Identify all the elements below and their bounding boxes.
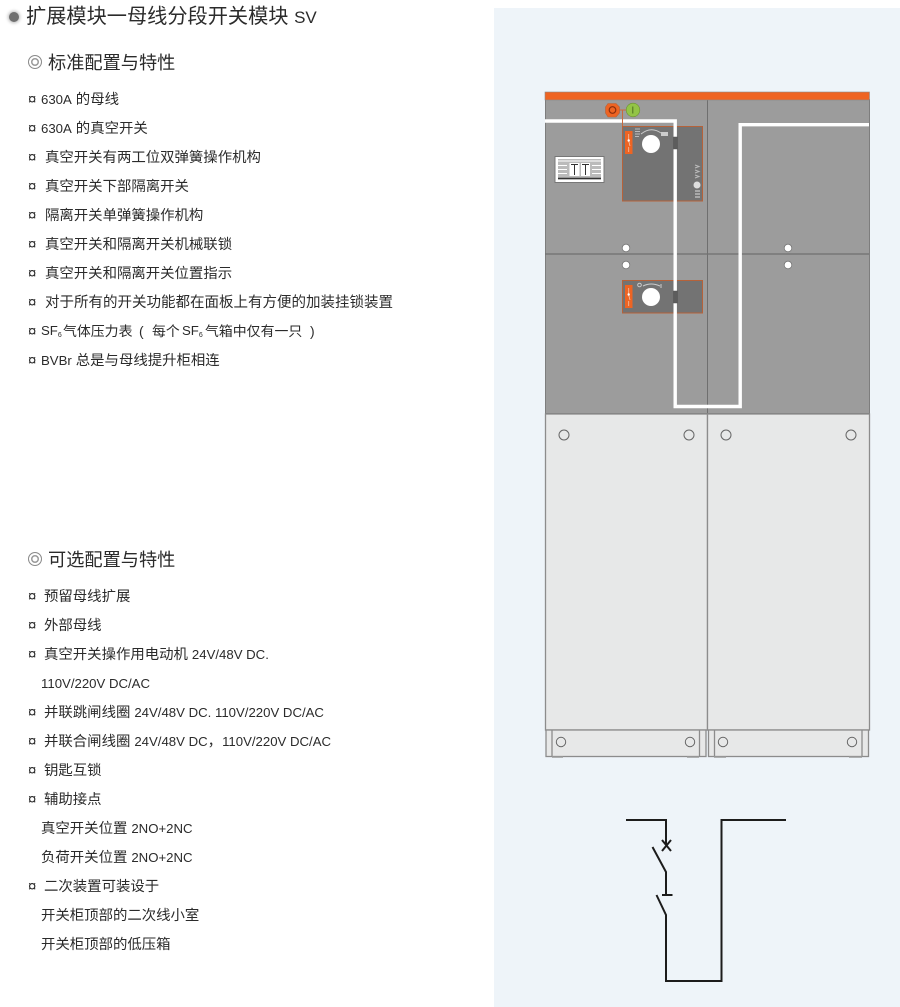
upper gray panels (545, 99, 870, 414)
switchgear cabinet (545, 92, 870, 757)
title (6, 6, 317, 28)
item: ¤ (28, 178, 36, 195)
heading: standard configuration: 标准配置与特性 (48, 53, 175, 73)
item: 真空开关位置 2NO+2NC (41, 821, 193, 837)
item: ¤ (28, 646, 36, 663)
base plinth right (708, 730, 868, 757)
item: ¤ (28, 207, 36, 224)
item: BVBr 总是与母线提升柜相连 (41, 353, 220, 369)
item: 预留母线扩展 (44, 589, 130, 605)
heading: optional configuration: 可选配置与特性 (48, 550, 175, 570)
item: ¤ (28, 588, 36, 605)
lower door right (708, 414, 870, 730)
upper mechanism module (622, 126, 702, 201)
item: ¤ (28, 294, 36, 311)
item: SF6 (41, 323, 62, 339)
interlock latches (674, 137, 678, 303)
item: ¤ (28, 120, 36, 137)
item: 每个 (152, 323, 180, 339)
white busbar line (545, 121, 869, 406)
standard feature list (28, 91, 393, 369)
item: ( (139, 323, 144, 339)
title bullet (9, 12, 19, 22)
item: ¤ (28, 878, 36, 895)
orange top bar (545, 92, 870, 100)
item: 真空开关和隔离开关机械联锁 (45, 237, 232, 253)
item: ) (310, 323, 315, 339)
single line circuit schematic (626, 820, 786, 981)
item: ¤ (28, 791, 36, 808)
nameplate (555, 156, 604, 182)
title text: 扩展模块一母线分段开关模块 SV (26, 6, 317, 28)
item: 外部母线 (44, 618, 102, 634)
lower mechanism module (622, 280, 702, 313)
item: ¤ (28, 236, 36, 253)
item: 气箱中仅有一只 (205, 323, 302, 339)
item: 开关柜顶部的低压箱 (41, 937, 171, 953)
item: 110V/220V DC/AC (41, 676, 150, 691)
item: ¤ (28, 617, 36, 634)
item: 真空开关下部隔离开关 (45, 179, 189, 195)
item: 并联合闸线圈 24V/48V DC，110V/220V DC/AC (44, 734, 331, 750)
item: 真空开关和隔离开关位置指示 (45, 266, 232, 282)
lower door left (546, 414, 708, 730)
item: 气体压力表 (63, 323, 132, 339)
item: 630A 的真空开关 (41, 121, 148, 137)
item: ¤ (28, 91, 36, 108)
item: SF6 (182, 323, 203, 339)
item: 630A 的母线 (41, 92, 119, 108)
item: 隔离开关单弹簧操作机构 (45, 208, 203, 224)
item: 开关柜顶部的二次线小室 (41, 908, 199, 924)
item: 辅助接点 (44, 792, 102, 808)
item: 对于所有的开关功能都在面板上有方便的加装挂锁装置 (45, 295, 393, 311)
item: ¤ (28, 323, 36, 340)
item: ¤ (28, 762, 36, 779)
panel indicator dots (622, 244, 792, 269)
pressure gauge and indicator (606, 103, 640, 126)
background panel (494, 8, 900, 1007)
base plinth left (546, 730, 706, 757)
door screws (559, 430, 856, 440)
optional feature list (28, 588, 331, 953)
item (28, 323, 315, 340)
item: 负荷开关位置 2NO+2NC (41, 850, 193, 866)
item: 并联跳闸线圈 24V/48V DC. 110V/220V DC/AC (44, 705, 324, 721)
item: 二次装置可装设于 (44, 879, 159, 895)
item: 真空开关操作用电动机 24V/48V DC. (44, 647, 269, 663)
item: ¤ (28, 265, 36, 282)
item: 钥匙互锁 (44, 763, 102, 779)
item: ¤ (28, 149, 36, 166)
item: ¤ (28, 733, 36, 750)
item: 真空开关有两工位双弹簧操作机构 (45, 150, 261, 166)
item: ¤ (28, 352, 36, 369)
item: ¤ (28, 704, 36, 721)
